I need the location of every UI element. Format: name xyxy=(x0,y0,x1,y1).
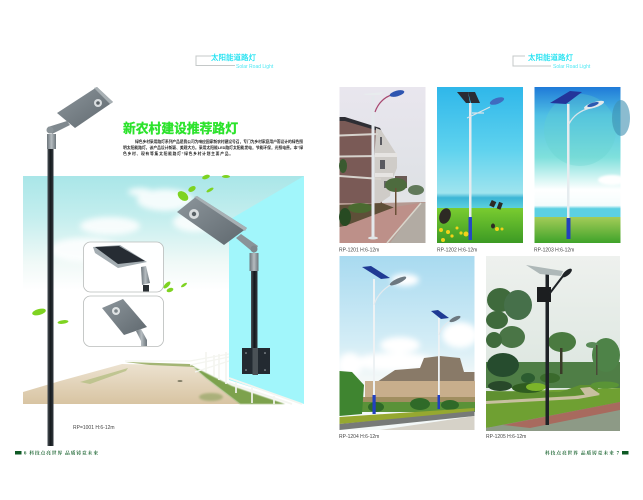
text block: description: 明太阳能路灯。该产品设计新颖、美观大方。采用太阳能LED路灯太阳能发电，节能环保，光照电费。本"绿 xyxy=(123,145,303,150)
lamp xyxy=(567,104,570,229)
lamps xyxy=(373,279,375,395)
wall bracket plate xyxy=(242,348,270,374)
heading: left page section: Solar Road Light xyxy=(236,64,274,70)
photo: RP-1203 xyxy=(534,87,630,243)
heading: left page section xyxy=(196,52,274,70)
scene fence xyxy=(125,352,302,404)
panel: left page scene xyxy=(23,176,304,404)
label: RP-1205: RP-1205 H:6-12m xyxy=(486,434,526,440)
scene wall xyxy=(229,176,304,404)
heading: right page section: Solar Road Light xyxy=(553,64,591,70)
footer: right xyxy=(545,450,628,456)
label: RP-1204: RP-1204 H:6-12m xyxy=(339,434,379,440)
text block: description: 色乡村、现有等集太阳能路灯"绿色乡村计划主要产品。 xyxy=(123,151,233,156)
photo: RP-1201 xyxy=(339,87,426,243)
palm tree xyxy=(340,371,364,416)
label: RP-1203: RP-1203 H:6-12m xyxy=(534,248,574,254)
wall-mounted lamp xyxy=(177,196,270,375)
tall street lamp xyxy=(46,87,113,446)
heading: right page section: 太阳能道路灯 xyxy=(528,52,573,62)
icon: green leaves xyxy=(31,174,230,325)
label: RP-1001: RP=1001 H:6-12m xyxy=(73,425,115,431)
trees xyxy=(486,288,620,393)
scene dirt road xyxy=(23,352,302,404)
butterflies xyxy=(437,200,503,228)
text block: description xyxy=(123,139,303,156)
footer: right: 科技点亮世界 品质铸竟未来 7 xyxy=(545,450,620,456)
footer: left: 6 科技点亮世界 品质铸竟未来 xyxy=(24,450,98,456)
heading: right page section xyxy=(513,52,591,70)
title: new countryside: 新农村建设推荐路灯 xyxy=(123,121,238,136)
footer: left xyxy=(15,450,98,456)
inset: lamp underside view xyxy=(84,296,164,346)
brick building xyxy=(340,117,407,206)
label: RP-1202: RP-1202 H:6-12m xyxy=(437,248,477,254)
photo: RP-1204 xyxy=(338,256,478,430)
temple xyxy=(377,356,474,400)
scene clouds xyxy=(49,188,217,262)
text block: description: 绿色乡村采用路灯系列产品是我公司为响应国家新农村建设号召，专门为乡村家庭用户而设计的绿色照 xyxy=(135,139,303,144)
scene sky xyxy=(23,176,304,404)
lamp xyxy=(372,96,374,238)
photo: RP-1205 xyxy=(486,256,620,431)
photo: RP-1202 xyxy=(437,87,523,243)
lamp xyxy=(546,274,549,425)
heading: left page section: 太阳能道路灯 xyxy=(211,52,256,62)
inset: solar panel top view xyxy=(84,242,164,292)
lamp xyxy=(469,103,472,238)
label: RP-1201: RP-1201 H:6-12m xyxy=(339,248,379,254)
